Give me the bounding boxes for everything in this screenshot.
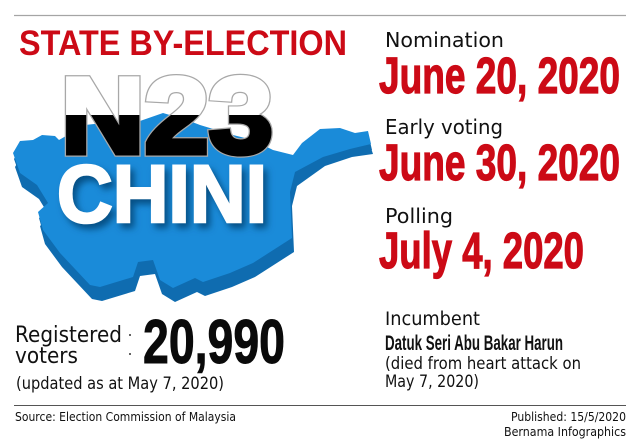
constituency name CHINI: CHINI — [57, 149, 267, 240]
registered voters block: 20,990 — [143, 308, 285, 377]
polling date — [379, 204, 584, 279]
incumbent block: Incumbent — [385, 309, 480, 330]
incumbent block — [385, 309, 581, 391]
title: STATE BY-ELECTION — [19, 24, 347, 63]
publication credit: Published: 15/5/2020 — [511, 409, 626, 424]
publication credit — [504, 409, 626, 439]
nomination date: Nomination — [385, 28, 504, 52]
incumbent block: May 7, 2020) — [385, 372, 479, 391]
source note: Source: Election Commission of Malaysia — [15, 409, 236, 424]
early voting date: Early voting — [385, 115, 503, 139]
registered voters block: (updated as at May 7, 2020) — [16, 374, 224, 393]
registered voters block — [15, 308, 285, 393]
constituency name CHINI: CHINI — [57, 149, 267, 240]
registered voters block: Registered — [15, 323, 122, 348]
constituency code N23: N23 — [61, 55, 273, 176]
map: Chini constituency — [13, 113, 373, 302]
publication credit: Bernama Infographics — [504, 424, 626, 439]
registered voters block: voters — [15, 344, 78, 369]
constituency code N23: N23 — [61, 55, 273, 176]
polling date: Polling — [385, 204, 453, 228]
incumbent block: (died from heart attack on — [385, 354, 581, 373]
